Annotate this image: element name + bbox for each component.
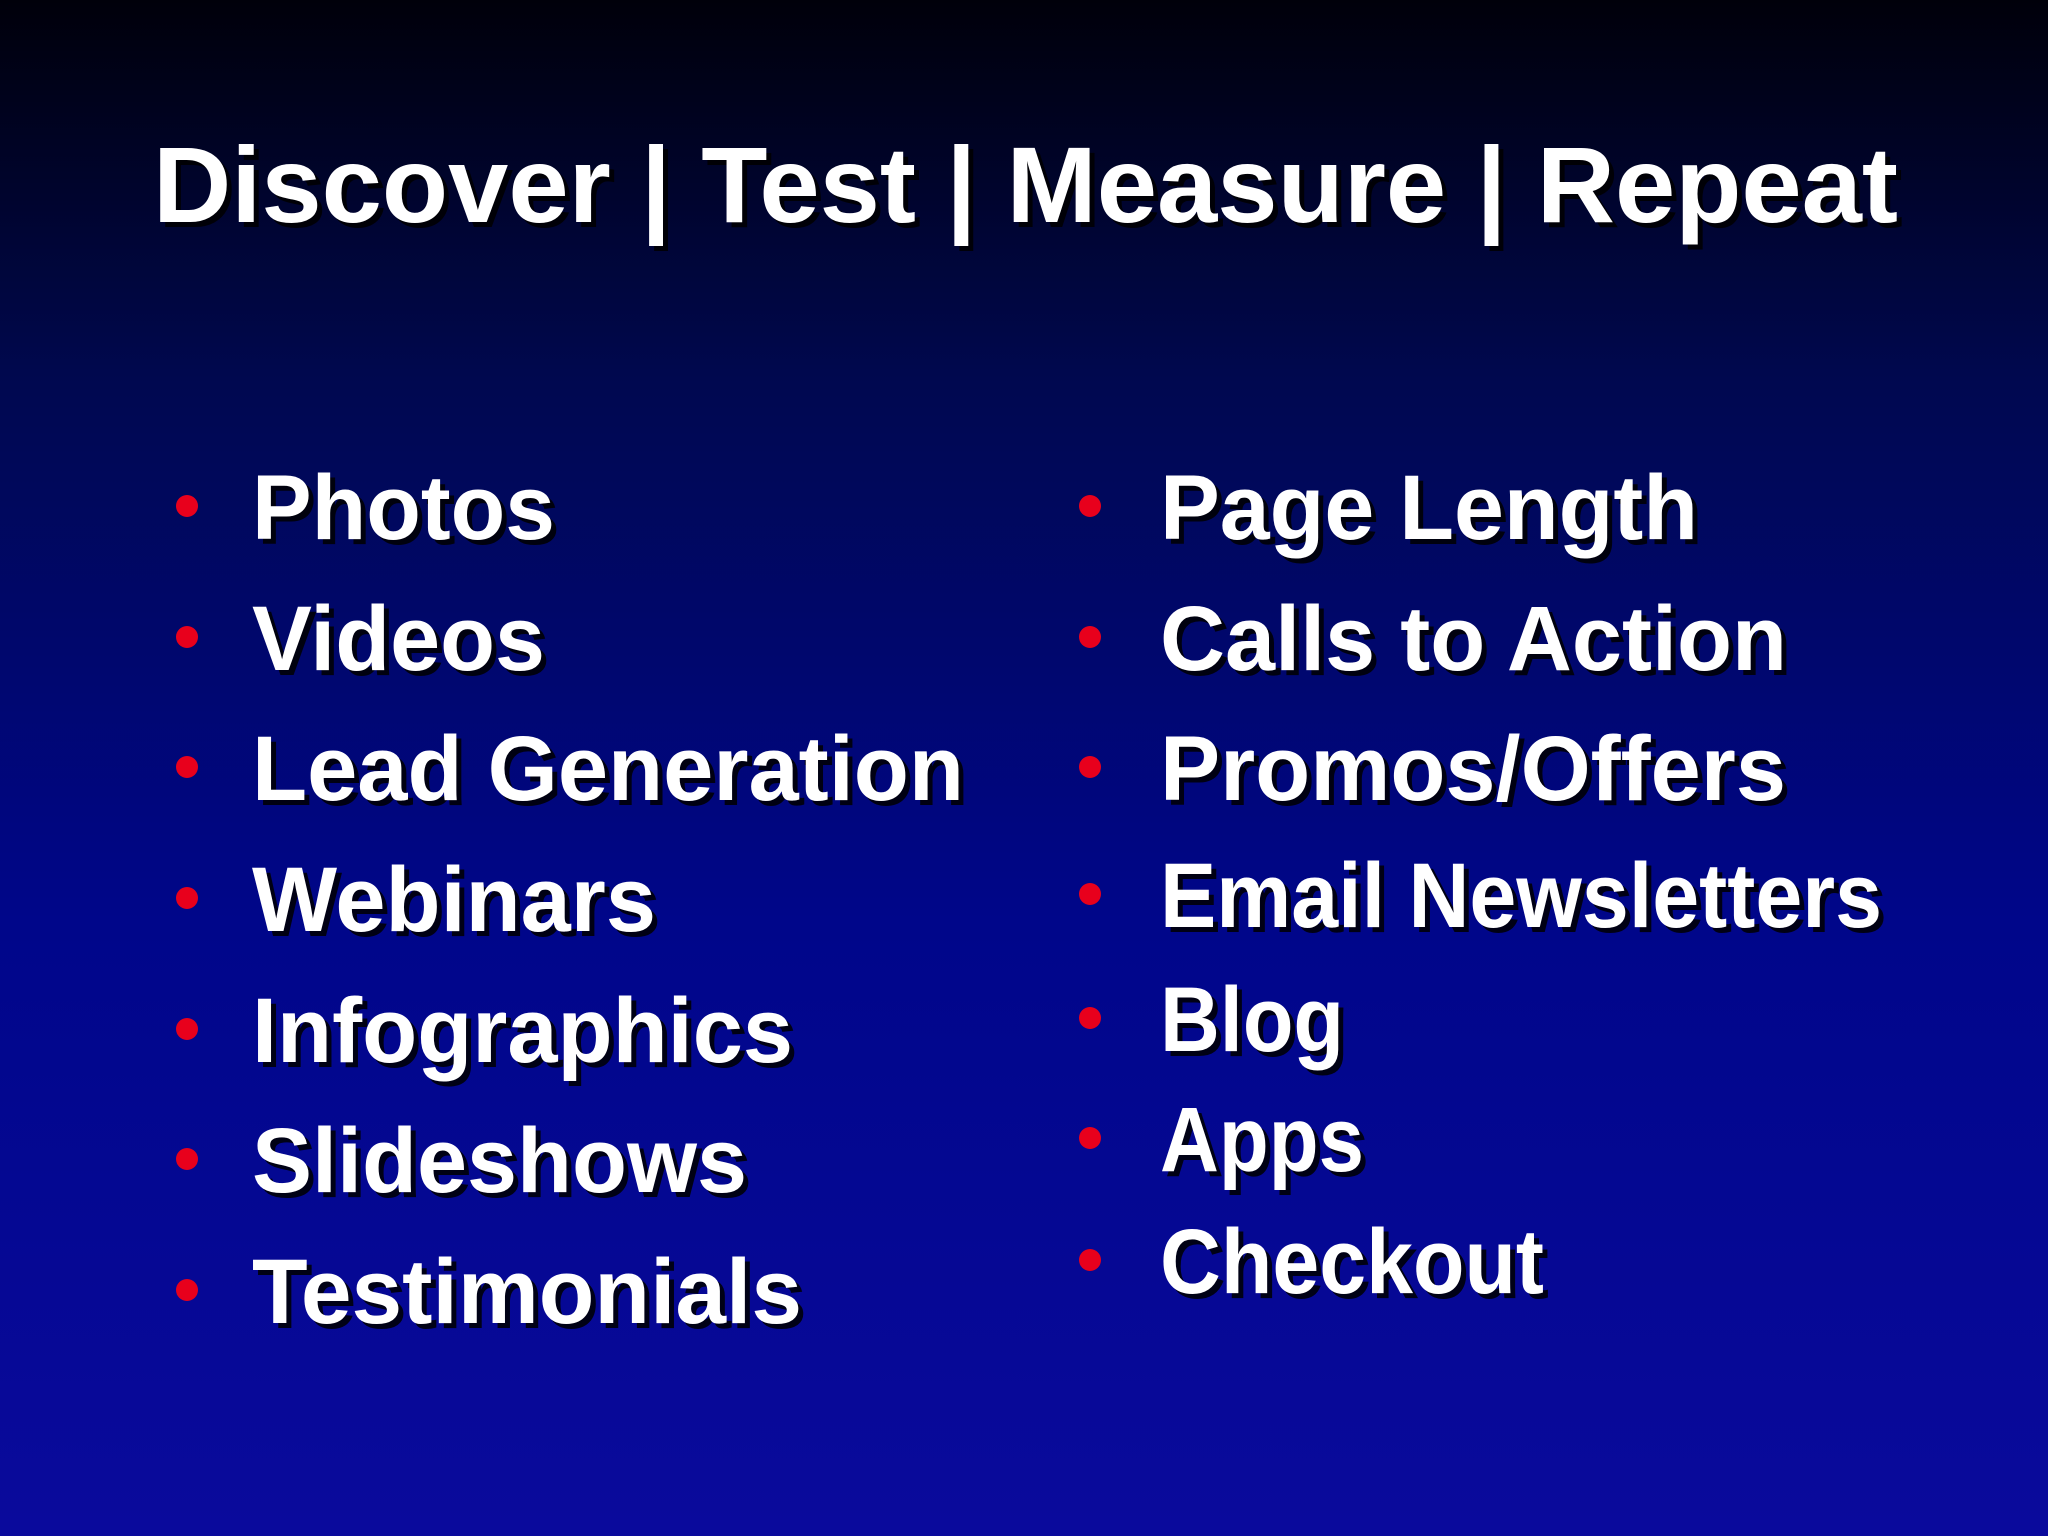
item: Lead Generation: Lead Generation: [257, 723, 969, 825]
item: Promos/Offers: Promos/Offers: [1160, 718, 1786, 820]
item: Infographics: Infographics: [252, 980, 793, 1082]
item: Calls to Action: Calls to Action: [1160, 588, 1787, 690]
item: Photos: Photos: [252, 457, 555, 559]
item: Page Length: Page Length: [1165, 462, 1703, 564]
item: Email Newsletters: Email Newsletters: [1165, 850, 1887, 952]
item: Infographics: Infographics: [257, 985, 798, 1087]
item: Photos: Photos: [257, 462, 560, 564]
item: Videos: Videos: [257, 593, 550, 695]
item: Calls to Action: Calls to Action: [1165, 593, 1792, 695]
item: Blog: Blog: [1160, 969, 1344, 1071]
item: Apps: Apps: [1160, 1089, 1364, 1191]
item: Apps: Apps: [1165, 1094, 1369, 1196]
title: Discover | Test | Measure | Repeat: [153, 124, 1898, 247]
item: Testimonials: Testimonials: [257, 1246, 807, 1348]
item: Testimonials: Testimonials: [252, 1241, 802, 1343]
item: Lead Generation: Lead Generation: [252, 718, 964, 820]
item: Slideshows: Slideshows: [252, 1110, 747, 1212]
item: Webinars: Webinars: [257, 854, 661, 956]
item: Blog: Blog: [1165, 974, 1349, 1076]
item: Slideshows: Slideshows: [257, 1115, 752, 1217]
item: Webinars: Webinars: [252, 849, 656, 951]
item: Videos: Videos: [252, 588, 545, 690]
item: Checkout: Checkout: [1165, 1216, 1549, 1318]
item: Checkout: Checkout: [1160, 1211, 1544, 1313]
item: Email Newsletters: Email Newsletters: [1160, 845, 1882, 947]
item: Promos/Offers: Promos/Offers: [1165, 723, 1791, 825]
item: Apps: [1079, 1089, 1369, 1196]
item: Page Length: Page Length: [1160, 457, 1698, 559]
title: Discover | Test | Measure | Repeat: [158, 129, 1903, 252]
list: right column: [1079, 457, 1887, 1318]
list: left column: [176, 457, 969, 1348]
item: Blog: [1079, 969, 1349, 1076]
